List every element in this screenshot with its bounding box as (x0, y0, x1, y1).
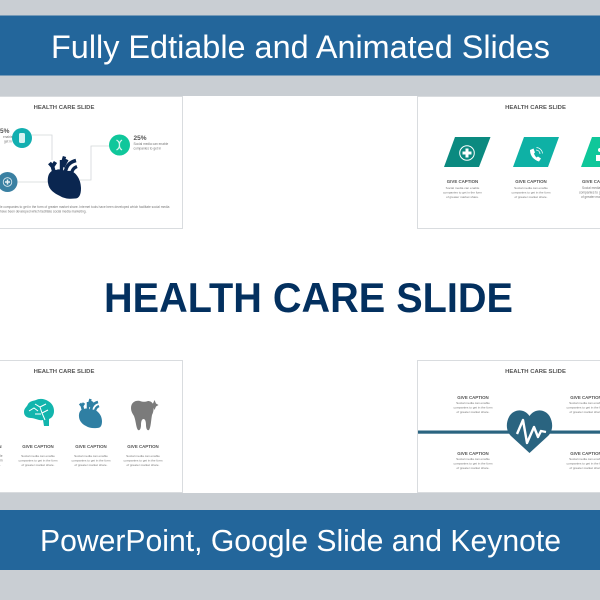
partial caption: m (0, 458, 3, 462)
caption 2: companies to get in the form (511, 190, 551, 194)
caption 1: companies to get in the form (443, 190, 482, 194)
stat: 25%: 25% (134, 135, 147, 142)
stat: 25%: Social media can enable (134, 142, 168, 146)
partial caption: le (0, 454, 3, 458)
top banner (0, 16, 600, 76)
caption brain: companies to get in the form (18, 458, 58, 462)
caption bottom left: of greater market share. (456, 466, 490, 470)
stat: 25% (134, 135, 168, 150)
caption tooth: companies to get in the form (123, 458, 163, 462)
icon: heart (79, 399, 102, 428)
icon: heart with pulse (507, 410, 552, 453)
icon: anatomical heart (48, 156, 81, 199)
caption bottom right (566, 451, 600, 470)
partial caption: . (0, 463, 1, 467)
bottom banner (0, 510, 600, 570)
caption bottom left: companies to get in the form (453, 462, 493, 466)
icon: parallelogram partial (581, 137, 600, 167)
caption bottom left: Social media can enable (456, 457, 490, 461)
caption 1 (443, 179, 482, 199)
caption brain (18, 444, 58, 467)
icon: brain (24, 399, 54, 426)
caption heart: GIVE CAPTION (75, 444, 107, 449)
stat: 25%: companies to get in (134, 146, 161, 150)
caption top left: Social media can enable (456, 401, 490, 405)
footer text: le companies to get in the form of greater market share. Internet tools have been developed which facilitate social media (0, 205, 170, 209)
caption brain: GIVE CAPTION (22, 444, 54, 449)
panel: slide with heart diagram (0, 96, 182, 228)
footer text: have been developed which facilitate social media marketing. (0, 210, 87, 214)
caption 1: of greater market share. (446, 195, 479, 199)
caption 2: GIVE CAPTION (515, 179, 547, 184)
partial caption (0, 444, 3, 467)
caption top left: companies to get in the form (453, 406, 493, 410)
icon: teal circle (12, 128, 32, 148)
stat: partial left (0, 128, 13, 144)
caption 1: Social media can enable (446, 186, 480, 190)
caption 1: GIVE CAPTION (447, 179, 478, 184)
icon: tooth with sparkle (131, 400, 158, 430)
slide title: HEALTH CARE SLIDE (34, 105, 94, 111)
bottom banner: PowerPoint, Google Slide and Keynote (40, 523, 561, 558)
slide title: HEALTH CARE SLIDE (34, 369, 94, 375)
caption heart: Social media can enable (74, 454, 108, 458)
caption heart: of greater market share. (74, 463, 108, 467)
caption tooth: GIVE CAPTION (127, 444, 159, 449)
top banner: Fully Edtiable and Animated Slides (51, 29, 550, 65)
caption top left: GIVE CAPTION (457, 395, 489, 400)
caption top right (566, 395, 600, 414)
main heading: HEALTH CARE SLIDE (104, 274, 513, 321)
caption top left: of greater market share. (456, 410, 490, 414)
caption bottom left: GIVE CAPTION (457, 451, 489, 456)
caption 2 (511, 179, 551, 199)
caption 3 partial (579, 179, 600, 199)
connector lines (17, 135, 110, 182)
icon: blue plus circle (0, 172, 18, 192)
panel: slide with pulse heart (418, 360, 600, 492)
stat: partial left: get in (4, 140, 12, 144)
slide title: HEALTH CARE SLIDE (505, 105, 566, 111)
pulse line (418, 430, 600, 434)
footer text (0, 205, 170, 214)
icon: parallelogram with phone (513, 137, 559, 167)
caption tooth: of greater market share. (126, 463, 160, 467)
caption heart: companies to get in the form (71, 458, 111, 462)
caption 2: Social media can enable (514, 186, 548, 190)
caption 3 partial: Social media (582, 186, 600, 190)
caption brain: of greater market share. (21, 463, 55, 467)
caption heart (71, 444, 111, 467)
caption bottom left (453, 451, 493, 470)
caption tooth: Social media can enable (126, 454, 160, 458)
white central area (0, 96, 600, 493)
slide title: HEALTH CARE SLIDE (505, 369, 566, 375)
panel: slide with organ icons (0, 360, 182, 492)
panel: slide with parallelograms (418, 96, 600, 228)
caption tooth (123, 444, 163, 467)
stat: partial left: 5% (0, 128, 10, 135)
icon: green DNA circle (109, 134, 130, 156)
caption brain: Social media can enable (21, 454, 55, 458)
stat: partial left: enable (3, 135, 13, 139)
icon: parallelogram with plus (444, 137, 490, 167)
caption top left (453, 395, 493, 414)
caption 2: of greater market share. (514, 195, 548, 199)
